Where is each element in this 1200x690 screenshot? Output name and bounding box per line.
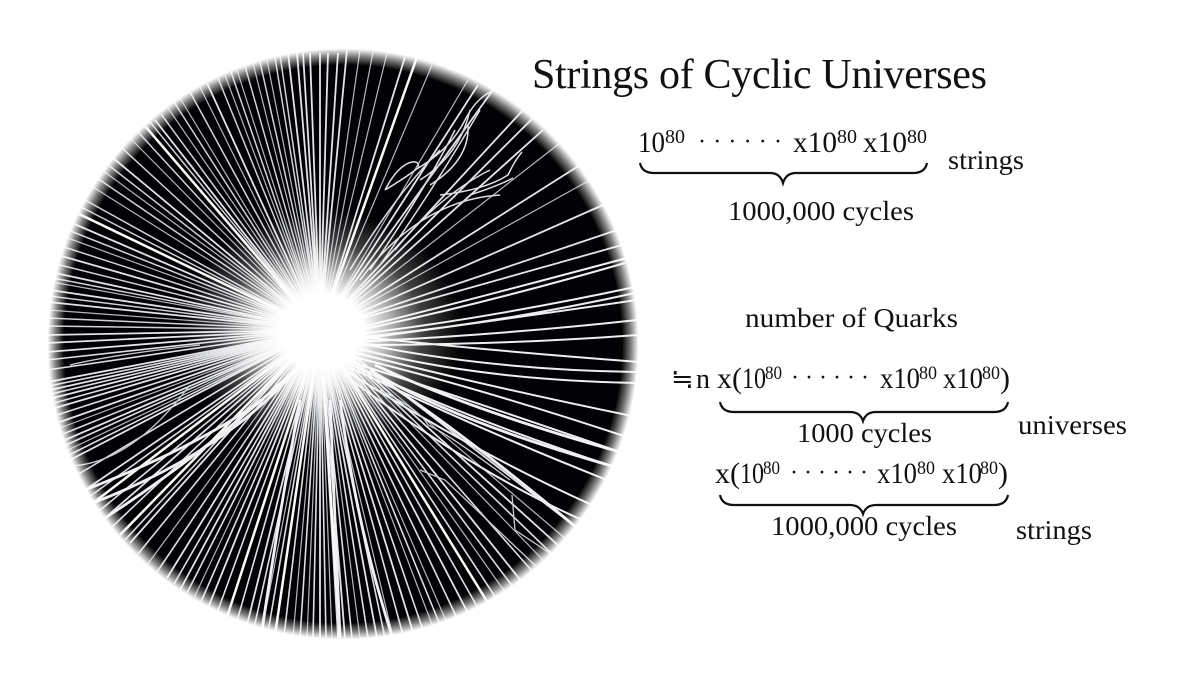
formula: strings: 80	[665, 126, 685, 148]
title: Strings of Cyclic Universes	[532, 52, 987, 98]
formula: strings	[638, 126, 1024, 226]
label: 1000,000 cycles: 1000,000 cycles	[771, 511, 957, 541]
formula: universes: ≒	[671, 364, 694, 394]
heading: number of Quarks: number of Quarks	[745, 303, 958, 333]
formula: strings per universe: 80	[917, 458, 935, 479]
formula: strings per universe	[715, 457, 1092, 545]
formula: strings: 10	[638, 126, 665, 159]
extra rays, upper left	[47, 55, 320, 330]
formula: strings: ······	[698, 129, 782, 155]
label: 1000,000 cycles: 1000,000 cycles	[728, 196, 914, 226]
extra rays, lower half	[47, 330, 551, 638]
brace	[640, 163, 927, 183]
label: strings: strings	[948, 145, 1024, 175]
label: strings: strings	[1016, 515, 1092, 545]
brace	[720, 495, 1008, 514]
formula: strings per universe: )	[998, 457, 1008, 490]
formula: universes: x10	[880, 362, 920, 395]
formula: strings: x10	[863, 126, 907, 159]
medium rays	[47, 50, 622, 638]
formula: universes: 80	[982, 363, 1000, 384]
brace	[720, 402, 1008, 421]
starburst of strings	[20, 20, 670, 670]
formula: strings: 80	[837, 126, 857, 148]
formula: universes: 80	[919, 363, 937, 384]
formula: strings per universe: x(	[715, 457, 740, 490]
formula: universes	[671, 362, 1127, 448]
thin wandering strands, bottom right	[70, 345, 560, 570]
white bundles	[85, 365, 620, 638]
formula: strings: x10	[793, 126, 837, 159]
formula: strings per universe: 10	[740, 457, 764, 490]
formula: universes: )	[1000, 362, 1010, 395]
formula: strings per universe: ······	[790, 460, 868, 486]
curved rays on the right	[345, 258, 640, 520]
label: 1000 cycles: 1000 cycles	[797, 418, 932, 448]
formula: universes: 10	[742, 362, 766, 395]
thin rays	[48, 50, 590, 638]
formula: strings per universe: 80	[980, 458, 998, 479]
formula: universes: 80	[765, 363, 782, 384]
label: universes: universes	[1018, 410, 1127, 440]
formula: strings per universe: x10	[877, 457, 917, 490]
formula: universes: x(	[717, 362, 742, 395]
formula: strings per universe: x10	[942, 457, 982, 490]
formula: strings: 80	[907, 126, 927, 148]
soft white edge	[20, 20, 670, 670]
formula: strings per universe: 80	[763, 458, 780, 479]
central glow	[182, 210, 462, 450]
formula: universes: n	[696, 363, 710, 395]
formula: universes: x10	[943, 362, 983, 395]
formula: universes: ······	[791, 365, 869, 391]
thin wandering strands, top right	[350, 92, 522, 280]
bright rays	[77, 57, 488, 638]
